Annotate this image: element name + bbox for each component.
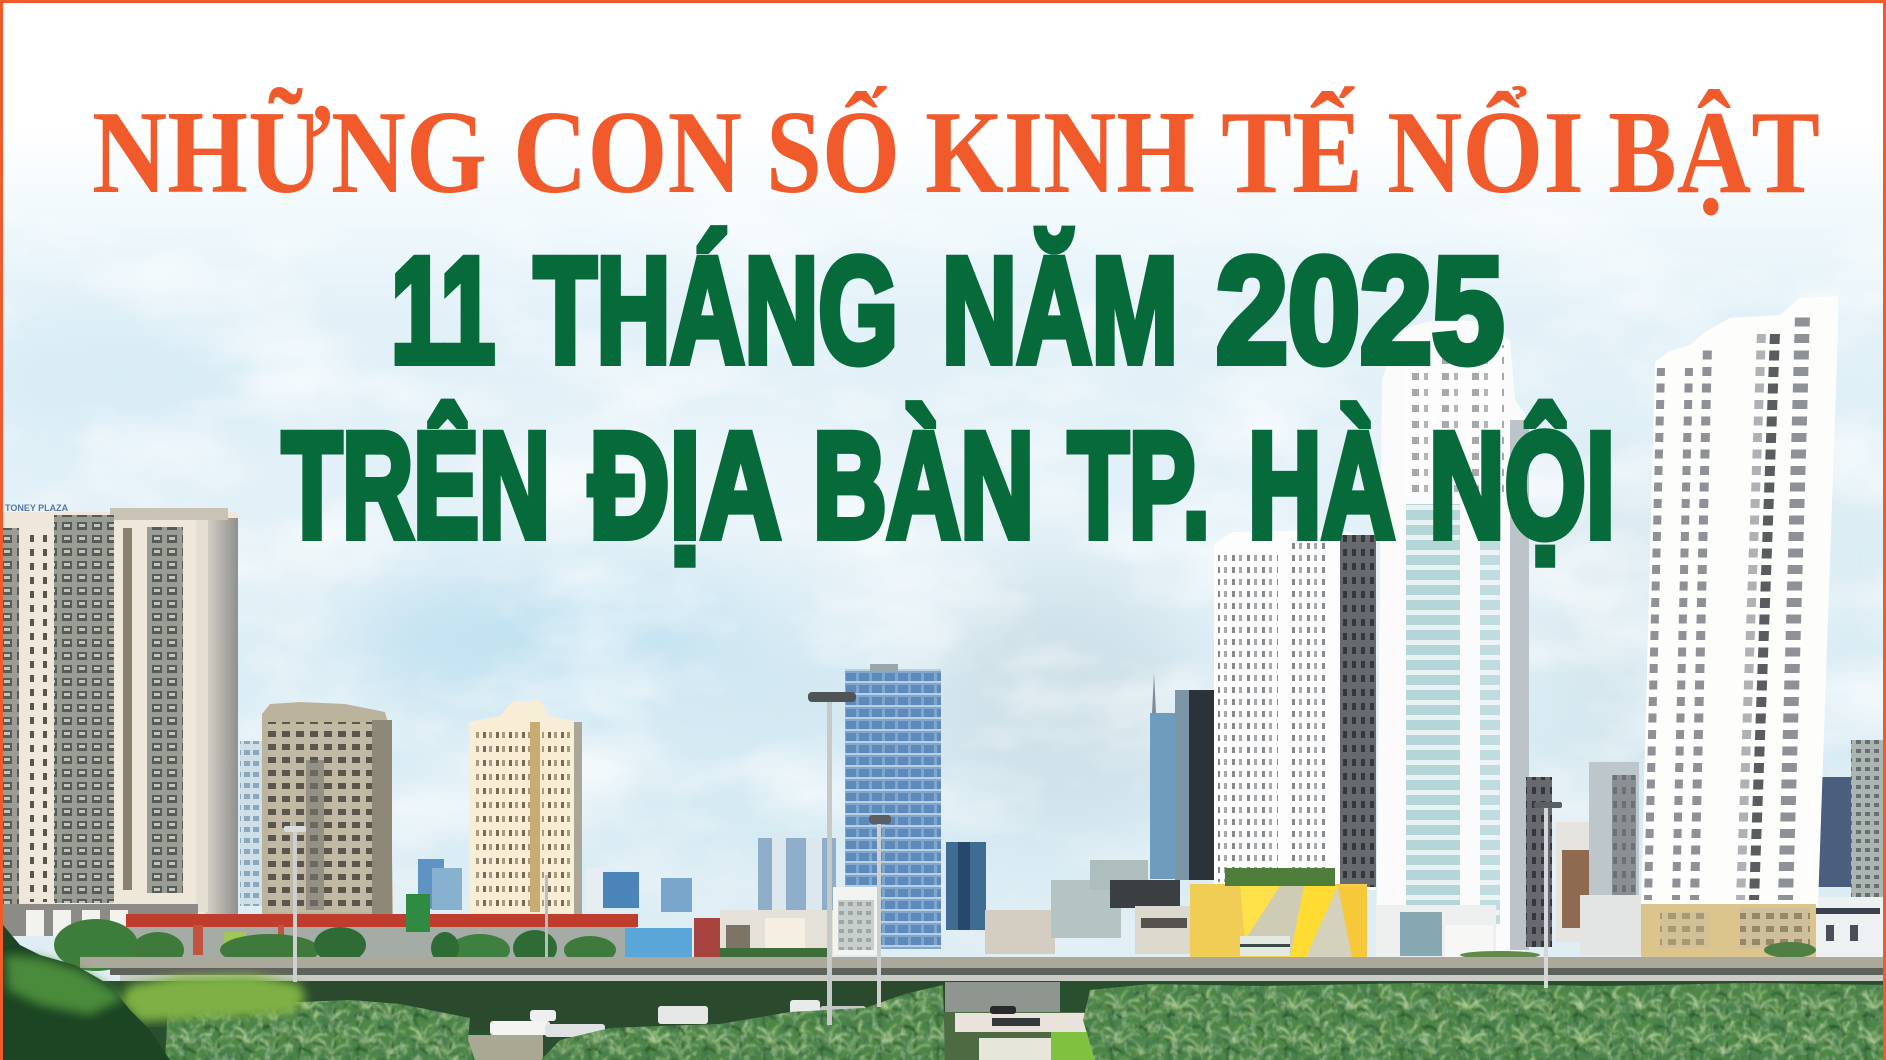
dark tree at left with bright bushes	[3, 925, 306, 1060]
title line 1: BẬT	[1608, 86, 1820, 218]
left tower complex	[3, 503, 238, 936]
title line 2: 2025	[1216, 226, 1504, 394]
central buildings	[1051, 673, 1215, 954]
title line 1: KINH	[925, 86, 1195, 218]
right background buildings	[1526, 740, 1884, 957]
title line 3: BÀN	[813, 401, 1034, 569]
road and vehicles under flyover	[300, 982, 1125, 1060]
green billboard	[406, 894, 430, 932]
title line 2: 11	[391, 226, 495, 394]
title line 3: TRÊN	[282, 401, 550, 569]
title line 1	[92, 86, 1820, 218]
tower E	[1641, 296, 1838, 958]
title line 3	[282, 401, 1615, 569]
title line 1: NHỮNG	[92, 86, 487, 218]
title line 1: TẾ	[1221, 86, 1363, 218]
twin tower and blue glass tower	[720, 664, 1055, 955]
title line 2: THÁNG	[534, 226, 898, 394]
yellow mall	[1190, 868, 1367, 957]
tower sign: TONEY PLAZA	[5, 503, 69, 513]
blue billboard	[625, 928, 692, 959]
title line 3: NỘI	[1429, 401, 1615, 569]
flyover road	[3, 957, 1886, 1060]
title line 1: NỔI	[1387, 86, 1584, 218]
title line 1: SỐ	[766, 86, 900, 218]
title line 3: HÀ	[1248, 401, 1395, 569]
title line 3: TP.	[1068, 401, 1210, 569]
red podium with billboards	[126, 894, 720, 959]
tower D	[1376, 318, 1529, 960]
street lamps	[284, 692, 1562, 1025]
trees behind flyover	[54, 919, 1816, 971]
title line 1: CON	[513, 86, 742, 218]
mid-left buildings	[240, 700, 692, 914]
palm trees	[166, 983, 1883, 1060]
tower C	[1214, 530, 1376, 890]
background: sky with clouds	[3, 176, 1883, 981]
title line 2	[391, 226, 1504, 394]
title line 3: ĐỊA	[589, 401, 781, 569]
title line 2: NĂM	[942, 226, 1178, 394]
